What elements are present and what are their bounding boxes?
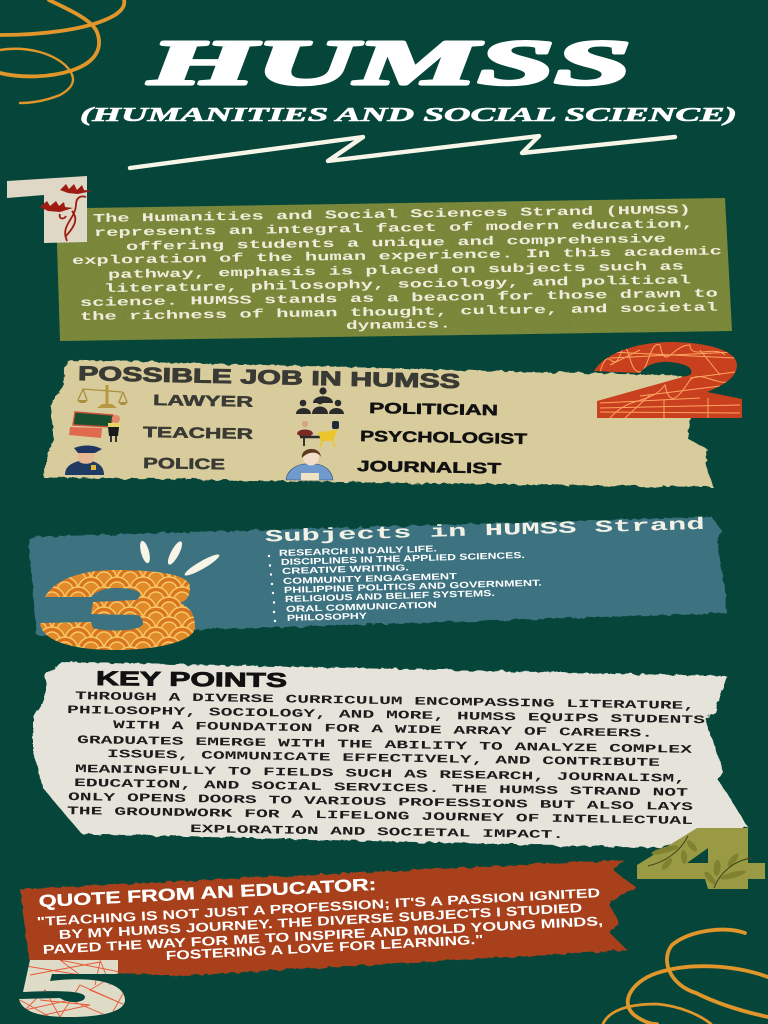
intro text: represents an integral facet of modern education, [94, 217, 694, 240]
decorative swirl: bottom right [603, 930, 768, 1024]
icon: journalist [286, 448, 333, 480]
icon: police [65, 445, 104, 475]
subjects list: DISCIPLINES IN THE APPLIED SCIENCES. [281, 550, 525, 567]
key points text: GRADUATES EMERGE WITH THE ABILITY TO ANALYZE COMPLEX [77, 734, 692, 757]
job label: journalist: JOURNALIST [357, 458, 501, 478]
panel background [20, 860, 637, 976]
number 2 [594, 342, 742, 418]
icon: politician [296, 387, 344, 414]
subjects list: RESEARCH IN DAILY LIFE. [279, 543, 437, 558]
quote heading: QUOTE FROM AN EDUCATOR: [38, 875, 377, 911]
panel: key points [33, 662, 765, 889]
icon: scales [77, 385, 128, 408]
icon: sparkle accents [138, 540, 221, 578]
job label: teacher: TEACHER [143, 424, 253, 443]
quote text: FOSTERING A LOVE FOR LEARNING." [165, 932, 484, 963]
quote text: PAVED THE WAY FOR ME TO INSPIRE AND MOLD YOUNG MINDS, [42, 913, 603, 957]
key points text: EDUCATION, AND SOCIAL SERVICES. THE HUMSS STRAND NOT [74, 777, 688, 800]
decorative swirl: top left [0, 0, 124, 103]
number 4 [637, 828, 765, 889]
intro text: exploration of the human experience. In this academic [72, 244, 722, 268]
quote text: "TEACHING IS NOT JUST A PROFESSION; IT'S A PASSION IGNITED [36, 885, 600, 929]
icon: psychologist [297, 421, 339, 447]
subjects list: COMMUNITY ENGAGEMENT [283, 571, 458, 586]
panel: introduction [7, 176, 732, 341]
intro text: the richness of human thought, culture, and societal [80, 301, 718, 324]
panel background [28, 517, 726, 635]
title: HUMSS [147, 27, 631, 98]
number 1 [7, 176, 92, 243]
subjects list: CREATIVE WRITING. [282, 562, 409, 576]
quote text [36, 885, 603, 963]
job label: psychologist: PSYCHOLOGIST [360, 428, 527, 448]
key points text: THE GROUNDWORK FOR A LIFELONG JOURNEY OF INTELLECTUAL [67, 805, 693, 828]
panel: educator quote [19, 860, 637, 1017]
panel: subjects [28, 516, 726, 650]
key points text: ONLY OPENS DOORS TO VARIOUS PROFESSIONS BUT ALSO LAYS [68, 791, 693, 814]
heading: POSSIBLE JOB IN HUMSS [78, 363, 460, 393]
key points text: MEANINGFULLY TO FIELDS SUCH AS RESEARCH, JOURNALISM, [75, 763, 686, 786]
intro text: science. HUMSS stands as a beacon for those drawn to [80, 287, 718, 310]
key points text: ISSUES, COMMUNICATE EFFECTIVELY, AND CONTRIBUTE [107, 748, 660, 770]
icon: teacher [69, 412, 120, 442]
zigzag underline [130, 136, 675, 168]
subjects list: ORAL COMMUNICATION [286, 600, 437, 614]
panel background [33, 662, 748, 848]
intro text: offering students a unique and comprehensive [126, 232, 666, 254]
number 3 [40, 570, 195, 650]
subjects list: PHILOSOPHY [287, 611, 367, 623]
key points text: THROUGH A DIVERSE CURRICULUM ENCOMPASSING LITERATURE, [75, 690, 695, 713]
intro text: dynamics. [346, 317, 451, 333]
subjects heading: Subjects in HUMSS Strand [265, 516, 705, 547]
panel: possible jobs [43, 342, 742, 487]
key points text: PHILOSOPHY, SOCIOLOGY, AND MORE, HUMSS EQUIPS STUDENTS [67, 704, 705, 727]
key points heading: KEY POINTS [96, 668, 287, 692]
job label: lawyer: LAWYER [153, 392, 253, 411]
panel background [43, 360, 713, 487]
subjects list [268, 543, 542, 623]
key points text [67, 690, 705, 842]
number 5 [19, 960, 125, 1017]
subtitle: (HUMANITIES AND SOCIAL SCIENCE) [80, 104, 737, 126]
panel background [56, 198, 732, 341]
intro text: literature, philosophy, sociology, and political [104, 273, 691, 296]
job label: politician: POLITICIAN [369, 400, 498, 419]
job label: police: POLICE [143, 455, 225, 473]
subjects list: PHILIPPINE POLITICS AND GOVERNMENT. [284, 578, 542, 595]
intro text: pathway, emphasis is placed on subjects such as [108, 259, 684, 282]
key points text: WITH A FOUNDATION FOR A WIDE ARRAY OF CAREERS. [113, 719, 653, 741]
intro text [72, 203, 722, 333]
key points text: EXPLORATION AND SOCIETAL IMPACT. [190, 823, 564, 842]
quote text: BY MY HUMSS JOURNEY. THE DIVERSE SUBJECTS I STUDIED [58, 900, 582, 942]
subjects list: RELIGIOUS AND BELIEF SYSTEMS. [285, 588, 495, 604]
intro text: The Humanities and Social Sciences Strand (HUMSS) [93, 203, 691, 226]
